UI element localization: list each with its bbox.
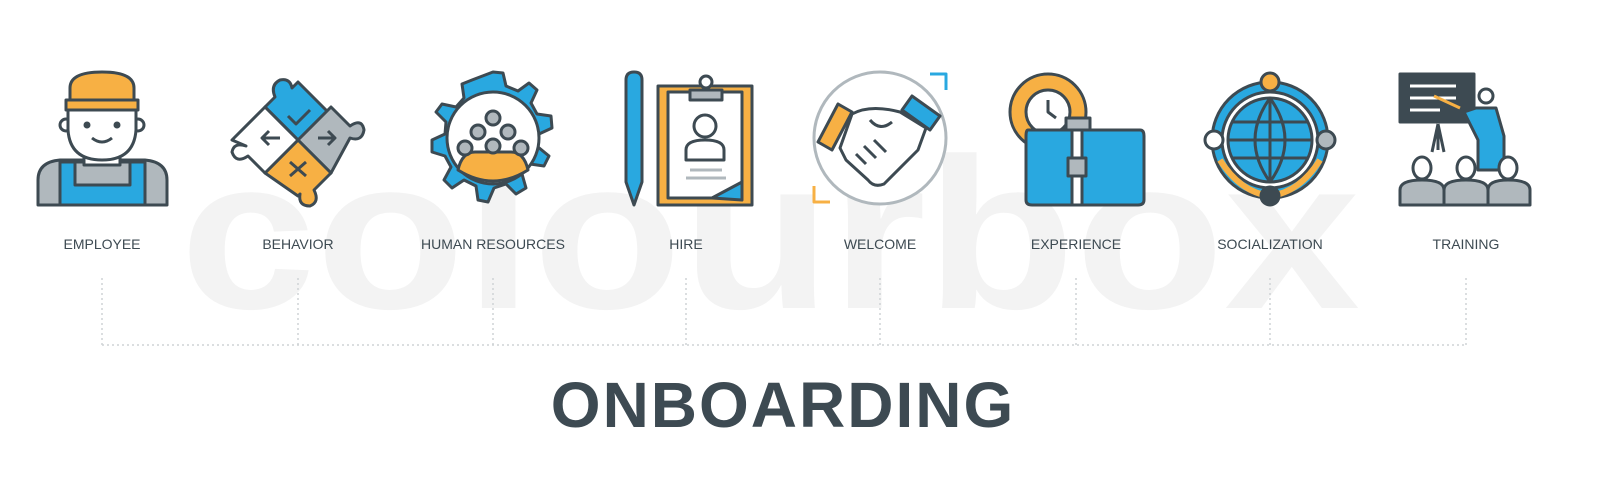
icon: experience (1010, 74, 1144, 205)
labels: SOCIALIZATION (1217, 236, 1323, 252)
icon: socialization (1205, 73, 1335, 205)
icon: welcome handshake (814, 72, 946, 204)
labels: HUMAN RESOURCES (421, 236, 565, 252)
icon: hire (626, 72, 752, 205)
labels: WELCOME (844, 236, 916, 252)
labels (63, 236, 1499, 252)
icon: employee (38, 72, 167, 205)
labels: EXPERIENCE (1031, 236, 1121, 252)
watermark: colourbox (180, 113, 1360, 354)
title: ONBOARDING (551, 369, 1015, 441)
labels: EMPLOYEE (63, 236, 141, 252)
labels: TRAINING (1433, 236, 1499, 252)
labels: BEHAVIOR (262, 236, 334, 252)
labels: HIRE (669, 236, 703, 252)
icon: behavior puzzle (232, 80, 364, 206)
icon: training (1400, 74, 1530, 205)
icon: human resources gear (432, 72, 552, 202)
